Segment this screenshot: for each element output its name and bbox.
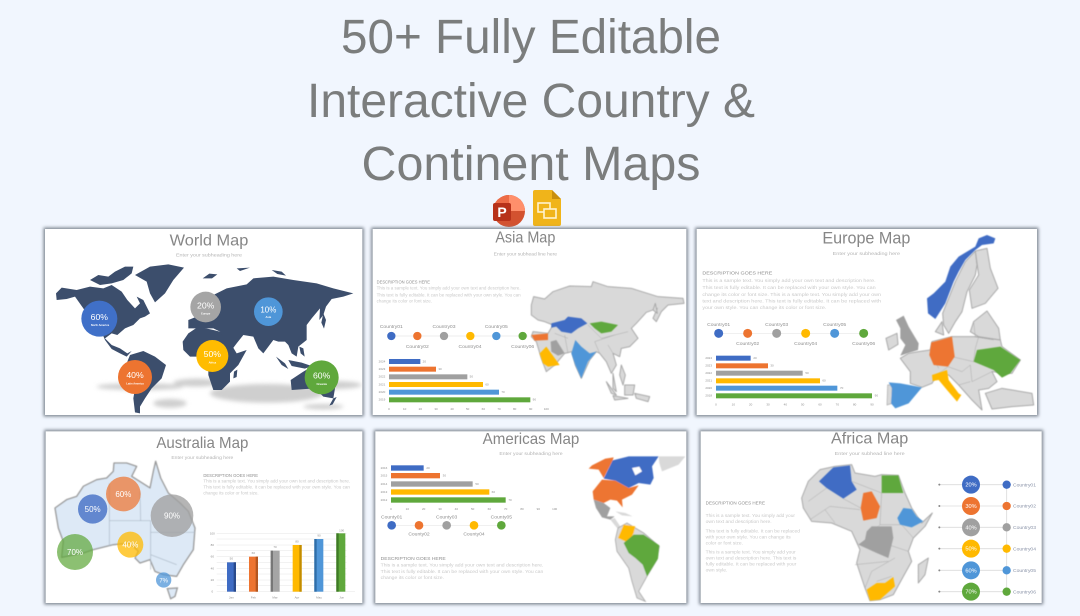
legend timeline: County02	[408, 532, 430, 538]
map shadow	[97, 379, 362, 409]
bubble: 90%	[151, 494, 193, 537]
row: Country02 30%	[962, 497, 1036, 515]
bar chart: 60	[818, 402, 822, 406]
map of Asia	[531, 282, 684, 402]
bubble: North America 60%	[81, 301, 117, 337]
column chart: 70	[273, 545, 277, 549]
bubble: Europe 20%	[190, 292, 221, 322]
bar chart: 2021	[705, 379, 712, 383]
bubble: 60%: 60%	[115, 490, 131, 499]
bar chart: 2012	[381, 498, 388, 502]
bar chart: 80	[853, 402, 857, 406]
bubble: Oceania 60%: 60%	[313, 371, 331, 381]
description: with your own style. You can change its	[706, 534, 791, 539]
panel subheading: Enter your subheading here	[176, 253, 242, 258]
column chart: Feb	[251, 595, 256, 599]
bar chart: 40	[450, 407, 454, 411]
bar chart: 2021	[379, 382, 386, 386]
description: This text is fully editable. It can be replaced with your own style. You can	[203, 485, 350, 490]
bar chart	[381, 465, 557, 511]
bubble: 7%: 7%	[159, 578, 169, 584]
bar chart: 60	[492, 490, 495, 494]
legend timeline: Country05	[823, 322, 846, 328]
bubble: North America 60%: North America	[91, 323, 110, 327]
description: change its color or font size.	[377, 299, 432, 304]
description: This is a sample text. You simply add your	[706, 549, 796, 554]
bar chart: 70	[508, 498, 512, 502]
bar chart: 20	[423, 359, 426, 363]
bar chart: 60	[488, 507, 491, 511]
bar chart: 0	[390, 507, 392, 511]
bar chart: 30	[770, 364, 774, 368]
column chart: 90	[317, 533, 321, 537]
description: This is a sample text. You simply add your own text and description here.	[381, 563, 543, 568]
bar chart: 2020	[705, 386, 712, 390]
row: Country04 50%: 50%	[965, 547, 977, 553]
bar chart: 2024	[379, 359, 386, 363]
description: your own style. You can change its color or font size.	[702, 305, 826, 310]
bar chart: 50	[470, 375, 473, 379]
description: This is a sample text. You simply add your own text and description here.	[702, 278, 876, 283]
title	[307, 11, 755, 191]
bubble: 50%: 50%	[85, 505, 101, 514]
map of Australia	[55, 461, 195, 599]
column chart: 0	[211, 590, 213, 594]
bar chart	[705, 356, 878, 406]
bar chart: 70	[501, 390, 505, 394]
row: Country02 30%: 30%	[965, 504, 977, 510]
bar chart: 10	[403, 407, 407, 411]
column chart: 80	[211, 543, 214, 547]
column chart: 60	[252, 551, 255, 555]
bar chart: 0	[388, 407, 390, 411]
panel title: Asia Map	[495, 229, 555, 246]
row: Country01 20%: Country01	[1013, 482, 1036, 488]
bar chart: 2015	[381, 474, 388, 478]
map of Europe	[886, 248, 1034, 410]
legend timeline: Country06	[852, 341, 875, 347]
description: color or font size.	[706, 540, 743, 545]
title: Interactive Country &	[307, 75, 755, 128]
description: This is a sample text. You simply add your own text and description here.	[377, 286, 521, 291]
bubble: North America 60%: 60%	[91, 312, 108, 322]
description: DESCRIPTION GOES HERE	[706, 501, 766, 507]
bubble: Africa 50%: Africa	[209, 360, 217, 364]
description: This is a sample text. You simply add your	[706, 513, 795, 518]
bar chart: 2018	[705, 394, 712, 398]
bar chart: 20	[426, 466, 430, 470]
bubble: 7%	[156, 572, 171, 588]
bar chart: 50	[801, 402, 805, 406]
column chart	[210, 529, 355, 599]
bubble: Asia 10%: Asia	[266, 315, 272, 319]
panel title: Africa Map	[831, 431, 908, 448]
bar chart: 40	[784, 402, 787, 406]
column chart: 40	[211, 566, 214, 570]
row: Country04 50%: Country04	[1013, 546, 1036, 552]
bar chart: 20	[419, 407, 422, 411]
description: DESCRIPTION GOES HERE	[377, 279, 431, 285]
panel: Asia Map	[373, 229, 686, 415]
row: Country03 40%: Country03	[1013, 525, 1036, 531]
bar chart: 2022	[705, 371, 712, 375]
bar chart: 2013	[381, 490, 388, 494]
bar chart: 80	[520, 507, 524, 511]
highlighted countries	[531, 317, 618, 378]
row: Country05 60%: 60%	[965, 568, 977, 574]
column chart: 20	[211, 578, 214, 582]
row: Country02 30%: Country02	[1013, 504, 1036, 510]
bar chart: 2016	[381, 466, 388, 470]
description	[702, 271, 881, 310]
bubble: Oceania 60%	[305, 360, 339, 394]
icon: Google Slides	[533, 190, 561, 226]
bubble: Oceania 60%: Oceania	[316, 382, 327, 386]
description: fully editable. It can be replaced with your	[706, 561, 797, 566]
legend timeline	[380, 324, 534, 350]
legend timeline: Country02	[736, 341, 759, 347]
bar chart: 10	[732, 402, 735, 406]
bar chart	[379, 359, 549, 411]
bubble: 40%: 40%	[122, 541, 138, 550]
map of the Americas	[589, 456, 685, 601]
bar chart: 20	[749, 402, 753, 406]
description: This text is fully editable. It can be replaced with your own style. You can	[381, 569, 544, 574]
description: change its color or font size.	[381, 575, 444, 580]
column chart: Jun	[339, 595, 344, 599]
row: Country06 70%	[962, 583, 1036, 601]
description: DESCRIPTION GOES HERE	[381, 556, 446, 562]
bar chart: 30	[438, 507, 442, 511]
column chart: 80	[295, 539, 299, 543]
panel: Australia Map	[46, 431, 362, 603]
bar chart: 10	[406, 507, 409, 511]
bar chart: 90	[533, 398, 536, 402]
panel: World Map	[45, 229, 362, 415]
description: change its color or font size.	[203, 491, 259, 496]
bar chart: 50	[475, 482, 479, 486]
panel subheading: Enter your subheading here	[171, 455, 234, 460]
bar chart: 50	[805, 371, 809, 375]
world map	[56, 264, 353, 413]
highlighted countries	[887, 235, 1020, 408]
legend timeline: Country05	[485, 324, 508, 330]
legend timeline: Country04	[794, 341, 817, 347]
bar chart: 2023	[705, 364, 712, 368]
column chart: Mar	[272, 595, 278, 599]
bar chart: 20	[422, 507, 426, 511]
bubble: Latin America 40%	[118, 360, 152, 394]
row: Country03 40%	[962, 518, 1036, 536]
highlighted countries	[819, 465, 923, 601]
bar chart: 2020	[379, 390, 386, 394]
legend timeline: Country01	[380, 324, 403, 330]
bubble: 70%	[57, 534, 93, 570]
panel title: World Map	[170, 233, 248, 250]
bar chart: 2014	[381, 482, 388, 486]
column chart: Jan	[229, 595, 234, 599]
bar chart: 2019	[379, 398, 386, 402]
legend timeline: County03	[436, 514, 458, 520]
bar chart: 90	[875, 394, 878, 398]
legend timeline	[707, 322, 875, 347]
description	[706, 501, 800, 572]
row: Country04 50%	[962, 540, 1036, 558]
bar chart: 30	[434, 407, 438, 411]
column chart: May	[316, 595, 322, 599]
description	[381, 556, 544, 580]
row: Country06 70%: 70%	[965, 590, 977, 596]
panel title: Americas Map	[483, 431, 579, 448]
legend timeline: Country03	[765, 322, 788, 328]
icon: PowerPoint	[493, 195, 525, 227]
bar chart: 90	[529, 407, 533, 411]
map of Africa	[802, 465, 932, 601]
panel title: Europe Map	[822, 228, 910, 247]
description: This is a sample text. You simply add your own text and description here.	[203, 479, 350, 484]
panel subheading: Enter your subheading here	[833, 251, 900, 256]
panel: Europe Map	[697, 228, 1037, 415]
row: Country05 60%: Country05	[1013, 568, 1036, 574]
legend timeline: County04	[463, 532, 485, 538]
connector lines	[938, 484, 1007, 593]
description: This text is fully editable. It can be replaced with your own style. You can	[702, 285, 876, 290]
bar chart: 50	[471, 507, 475, 511]
bar chart: 2024	[705, 356, 712, 360]
row: Country01 20%: 20%	[965, 483, 977, 489]
description: own text and description here. This text is	[706, 555, 797, 560]
bubble: 60%	[106, 477, 141, 511]
bar chart: 2023	[379, 367, 386, 371]
bar chart: 20	[753, 356, 757, 360]
icon: PowerPoint: P	[497, 204, 507, 220]
bar chart: 90	[870, 402, 874, 406]
description	[203, 473, 350, 496]
bar chart: 70	[836, 402, 839, 406]
bar chart: 70	[497, 407, 501, 411]
panel title: Australia Map	[156, 435, 248, 452]
bar chart: 0	[715, 402, 717, 406]
bubble: 90%: 90%	[164, 512, 180, 521]
description: own style.	[706, 567, 727, 572]
legend timeline: Country06	[511, 344, 534, 350]
title: Continent Maps	[362, 138, 700, 191]
column chart: Apr	[295, 595, 299, 599]
bar chart: 100	[544, 407, 549, 411]
bubble: Europe 20%: 20%	[197, 300, 215, 310]
description: This text is fully editable. It can be replaced	[706, 528, 800, 533]
description: This text is fully editable. It can be replaced with your own style. You can	[377, 292, 521, 297]
bubble: 40%	[117, 532, 143, 558]
bubble: Latin America 40%: Latin America	[126, 381, 144, 385]
bar chart: 60	[822, 379, 826, 383]
column chart: 100	[210, 531, 215, 535]
bar chart: 2022	[379, 375, 386, 379]
bar chart: 60	[485, 382, 489, 386]
bubble: 50%	[78, 494, 107, 524]
description: DESCRIPTION GOES HERE	[203, 473, 259, 479]
panel subheading: Enter your subhead line here	[835, 451, 905, 456]
bubble: Latin America 40%: 40%	[126, 370, 144, 380]
bubble: 70%: 70%	[67, 548, 83, 557]
bar chart: 30	[766, 402, 770, 406]
panel subheading: Enter your subhead line here	[494, 251, 557, 256]
bubble: Asia 10%: 10%	[260, 306, 276, 315]
bubble: Africa 50%: 50%	[204, 349, 221, 359]
panel subheading: Enter your subheading here	[499, 451, 563, 456]
bar chart: 80	[513, 407, 517, 411]
bar chart: 40	[455, 507, 458, 511]
title: 50+ Fully Editable	[341, 11, 721, 64]
legend timeline: Country01	[707, 322, 730, 328]
panel: Americas Map	[375, 431, 686, 603]
row: Country03 40%: 40%	[965, 525, 977, 531]
legend timeline: Country03	[432, 324, 456, 330]
legend timeline: Country04	[458, 344, 482, 350]
description: DESCRIPTION GOES HERE	[702, 271, 773, 277]
bar chart: 70	[504, 507, 508, 511]
row: Country06 70%: Country06	[1013, 589, 1036, 595]
bar chart: 60	[482, 407, 485, 411]
bubble: Asia 10%	[254, 297, 283, 326]
bar chart: 70	[840, 386, 844, 390]
description: text and description here. This text is fully editable. It can be replaced with	[702, 298, 881, 303]
column chart: 100	[339, 529, 344, 533]
column chart: 60	[211, 555, 214, 559]
description: own text and description here.	[706, 519, 772, 524]
bar chart: 30	[443, 474, 446, 478]
row: Country01 20%	[962, 476, 1036, 494]
legend timeline: Country02	[406, 344, 429, 350]
bar chart: 100	[552, 507, 557, 511]
panel: Africa Map	[701, 431, 1042, 603]
bar chart: 50	[466, 407, 470, 411]
description	[377, 279, 521, 304]
column chart: 50	[230, 557, 233, 561]
bar chart: 30	[438, 367, 442, 371]
description: change its color or font size. This is a sample text. You simply add your own	[702, 292, 881, 297]
bubble: Africa 50%	[196, 340, 228, 372]
legend timeline	[381, 514, 512, 538]
legend timeline: County05	[491, 514, 512, 520]
legend timeline: County01	[381, 514, 403, 520]
bubble: Europe 20%: Europe	[201, 312, 211, 316]
row: Country05 60%	[962, 561, 1036, 579]
bar chart: 90	[537, 507, 540, 511]
